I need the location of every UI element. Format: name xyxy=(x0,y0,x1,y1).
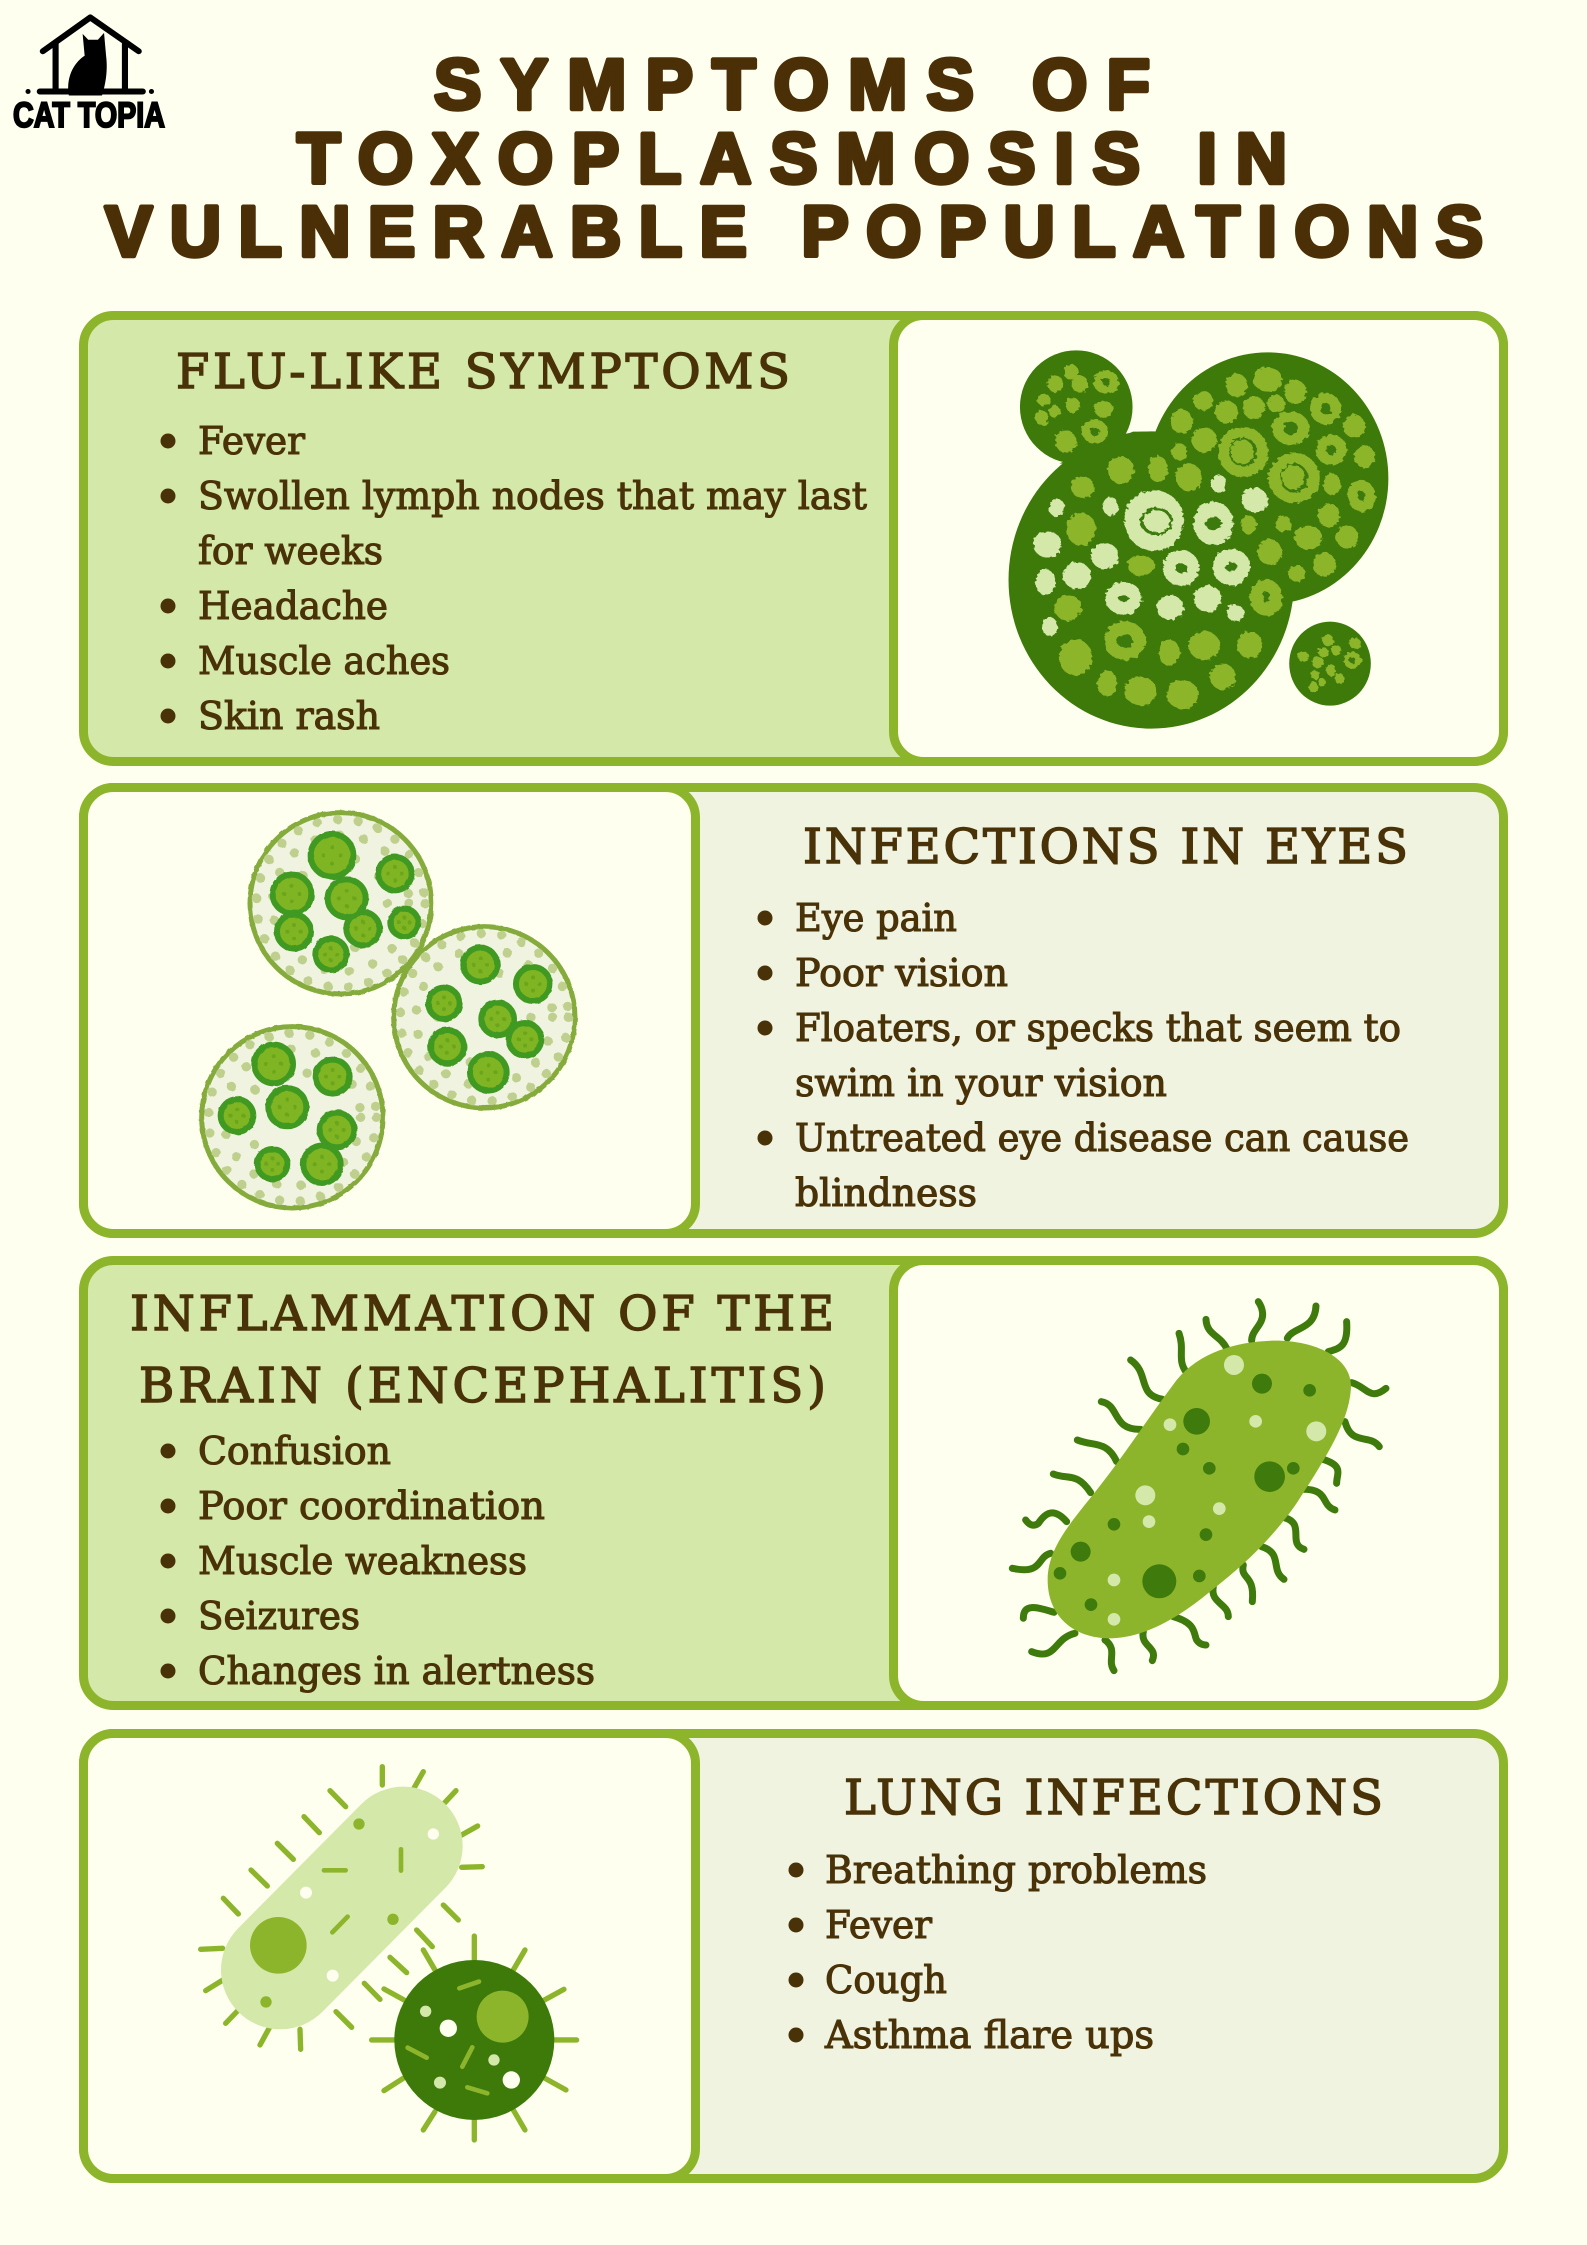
heading: infections in eyes: INFECTIONS IN EYES xyxy=(803,819,1408,875)
symptom list: Headache xyxy=(198,584,388,628)
illustration: dark green parasite cyst cluster xyxy=(1009,350,1388,729)
panel background xyxy=(84,788,1504,1234)
symptom list: Changes in alertness xyxy=(198,1649,595,1693)
logo: Cat Topia xyxy=(13,17,165,135)
symptom list: blindness xyxy=(795,1171,977,1215)
panel: lung infections xyxy=(84,1734,1504,2178)
symptom list: Skin rash xyxy=(198,694,380,738)
symptom list: Breathing problems xyxy=(825,1848,1207,1892)
title xyxy=(105,46,1483,272)
symptom list: Asthma flare ups xyxy=(824,2013,1154,2057)
panel background xyxy=(84,1260,1504,1706)
logo wordmark: CAT TOPIA xyxy=(13,96,165,135)
panel background xyxy=(84,1734,1504,2178)
symptom list: Swollen lymph nodes that may last xyxy=(198,474,867,518)
symptom list: Poor coordination xyxy=(198,1484,545,1528)
illustration: flagellated bacterium xyxy=(1012,1302,1386,1671)
symptom list: Poor vision xyxy=(795,951,1008,995)
panel: inflammation of the brain xyxy=(84,1260,1504,1706)
heading: inflammation of the brain (encephalitis) xyxy=(130,1286,834,1414)
symptom list: Fever xyxy=(825,1903,933,1947)
symptom list: Untreated eye disease can cause xyxy=(795,1116,1409,1160)
symptom list xyxy=(788,1848,1207,2057)
symptom list: Confusion xyxy=(198,1429,391,1473)
symptom list: Seizures xyxy=(198,1594,360,1638)
illustration: three tissue cysts xyxy=(202,813,575,1208)
symptom list: Muscle weakness xyxy=(198,1539,527,1583)
symptom list: swim in your vision xyxy=(795,1061,1167,1105)
panel background xyxy=(84,316,1504,762)
image card xyxy=(84,788,696,1234)
title: VULNERABLE POPULATIONS xyxy=(105,193,1483,272)
symptom list: Eye pain xyxy=(795,896,957,940)
title: TOXOPLASMOSIS IN xyxy=(297,120,1287,199)
title: SYMPTOMS OF xyxy=(434,46,1150,125)
illustration: rod and spherical germs xyxy=(201,1767,577,2140)
symptom list xyxy=(758,896,1409,1215)
panel: flu-like symptoms xyxy=(84,316,1504,762)
symptom list: Cough xyxy=(825,1958,947,2002)
heading: inflammation of the brain (encephalitis): BRAIN (ENCEPHALITIS) xyxy=(139,1358,826,1414)
image card xyxy=(894,1260,1504,1706)
image card xyxy=(84,1734,696,2178)
symptom list xyxy=(160,1429,595,1693)
panel: infections in eyes xyxy=(84,788,1504,1234)
symptom list: Floaters, or specks that seem to xyxy=(795,1006,1401,1050)
icon: house with cat xyxy=(26,17,154,96)
heading: inflammation of the brain (encephalitis): INFLAMMATION OF THE xyxy=(130,1286,834,1342)
symptom list: for weeks xyxy=(198,529,383,573)
heading: flu-like symptoms: FLU-LIKE SYMPTOMS xyxy=(176,344,790,400)
heading: lung infections: LUNG INFECTIONS xyxy=(844,1770,1383,1826)
image card xyxy=(894,316,1504,762)
symptom list xyxy=(160,419,867,738)
symptom list: Muscle aches xyxy=(198,639,450,683)
symptom list: Fever xyxy=(198,419,306,463)
